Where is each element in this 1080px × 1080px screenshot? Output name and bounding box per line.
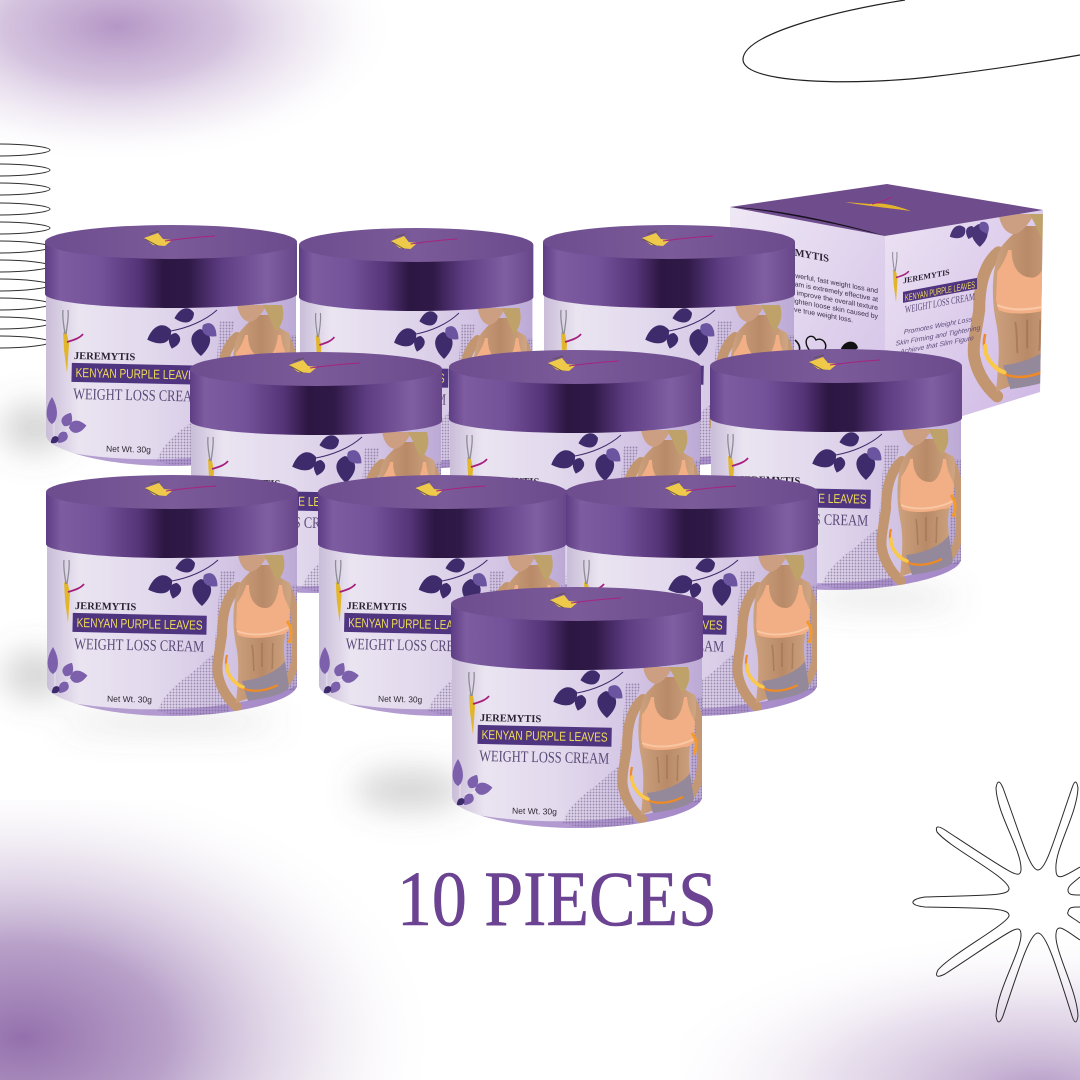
jar 4 label: WEIGHT LOSS CREAM [218, 513, 348, 533]
box back text: has powerful, fast weight loss and [775, 269, 878, 295]
jar 8 label: KENYAN PURPLE LEAVES [348, 615, 472, 633]
jar 7 [46, 475, 298, 720]
jar 7 label: KENYAN PURPLE LEAVES [76, 615, 203, 633]
jar 3 label: JEREMYTIS [572, 351, 633, 363]
jar 9 label [591, 601, 727, 706]
box benefit list: Promotes Weight Loss [904, 316, 973, 336]
background glow: bottom left [0, 800, 440, 1080]
box woman [968, 214, 1043, 402]
jar 9 label: Net Wt. 30g [627, 694, 672, 705]
jar 5 label: KENYAN PURPLE LEAVES [479, 490, 606, 508]
title: 10 PIECES [397, 855, 717, 942]
jar 9 label: WEIGHT LOSS CREAM [594, 636, 724, 656]
box back text: burse and improve the overall texture [764, 284, 878, 312]
jar 6 label: JEREMYTIS [739, 475, 800, 487]
jar 1 label [70, 351, 206, 456]
jar 4 [190, 352, 442, 597]
box label: WEIGHT LOSS CREAM [905, 292, 975, 316]
jar 4 label: KENYAN PURPLE LEAVES [220, 492, 347, 510]
jar 3 label: Net Wt. 30g [604, 444, 649, 455]
box back text: quickly tighten loose skin caused by [768, 293, 879, 321]
decorative ellipse line, top right [743, 0, 1080, 82]
jar 9 label: KENYAN PURPLE LEAVES [596, 615, 723, 633]
box label: KENYAN PURPLE LEAVES [905, 280, 975, 304]
box back text: achieve true weight loss. [778, 303, 853, 325]
jar 10 label: JEREMYTIS [480, 713, 541, 725]
box label: JEREMYTIS [903, 268, 950, 285]
box leaves [947, 220, 992, 247]
box flap shadow [730, 207, 885, 236]
box label [903, 262, 977, 316]
jar 10 label: KENYAN PURPLE LEAVES [481, 727, 608, 745]
jar 2 label: WEIGHT LOSS CREAM [325, 389, 446, 409]
jar 8 label: Net Wt. 30g [378, 694, 423, 705]
jar 3 label [568, 351, 704, 456]
box back icons [795, 336, 858, 356]
jar 1 label: KENYAN PURPLE LEAVES [75, 365, 202, 383]
jar 1 label: WEIGHT LOSS CREAM [73, 386, 203, 406]
box top logo [845, 197, 911, 211]
jar 3 label: KENYAN PURPLE LEAVES [573, 365, 700, 383]
jar 1 label: JEREMYTIS [74, 351, 135, 363]
jar 8 label: WEIGHT LOSS CREAM [346, 636, 474, 656]
box left face [730, 207, 885, 440]
jar 3 label: WEIGHT LOSS CREAM [571, 386, 701, 406]
product box [730, 184, 1043, 416]
jar 4 label: JEREMYTIS [219, 478, 280, 490]
jar 5 label: JEREMYTIS [478, 476, 539, 488]
jar 5 label [474, 476, 610, 581]
jar 7 label: Net Wt. 30g [107, 694, 152, 705]
jar 9 label: JEREMYTIS [595, 601, 656, 613]
jar 7 label [71, 601, 207, 706]
jar 10 label: Net Wt. 30g [512, 806, 557, 817]
box benefit list [896, 315, 980, 357]
jar shadows [1, 404, 960, 810]
jar 2 label: JEREMYTIS [326, 354, 383, 366]
box top [730, 184, 1043, 236]
jar 2 label: KENYAN PURPLE LEAVES [327, 369, 445, 386]
background glow: bottom right [680, 920, 1080, 1080]
jar 6 label: Net Wt. 30g [771, 568, 816, 579]
box back text: JEREMYTIS [768, 243, 829, 265]
box logo [893, 252, 909, 302]
jar 4 label: Net Wt. 30g [251, 571, 296, 582]
jar 8 label [343, 601, 477, 706]
jar 6 label: KENYAN PURPLE LEAVES [740, 489, 867, 507]
decorative star outline [913, 782, 1080, 1022]
jar 1 [45, 225, 297, 470]
jar 5 [449, 350, 701, 595]
decorative spiral line [0, 144, 50, 348]
box back text [764, 242, 879, 329]
jar 4 label [215, 478, 351, 583]
jar 2 label: Net Wt. 30g [356, 447, 398, 458]
jar 6 label: WEIGHT LOSS CREAM [738, 510, 868, 530]
jar 3 [543, 225, 795, 470]
jar 6 label [735, 475, 871, 580]
jar 2 [299, 228, 533, 473]
box benefit list: Achieve that Slim Figure [899, 335, 974, 356]
jar 9 [566, 475, 818, 720]
jar 5 label: Net Wt. 30g [510, 569, 555, 580]
jar 8 label: JEREMYTIS [346, 601, 407, 613]
jar 10 [451, 587, 703, 832]
background glow: top left [0, 0, 390, 190]
jar 10 label: WEIGHT LOSS CREAM [479, 748, 609, 768]
jar 8 [318, 475, 566, 720]
jar 10 label [476, 713, 612, 818]
jar 7 label: JEREMYTIS [75, 601, 136, 613]
box right face [885, 210, 1043, 440]
box benefit list: Skin Firming and Tightening [896, 325, 980, 348]
jar 7 label: WEIGHT LOSS CREAM [74, 636, 204, 656]
jar 5 label: WEIGHT LOSS CREAM [477, 511, 607, 531]
jar 1 label: Net Wt. 30g [106, 444, 151, 455]
jar 2 label [322, 354, 449, 459]
jar 6 [710, 349, 962, 594]
box back text: Hot Cream is extremely effective at [771, 277, 878, 304]
